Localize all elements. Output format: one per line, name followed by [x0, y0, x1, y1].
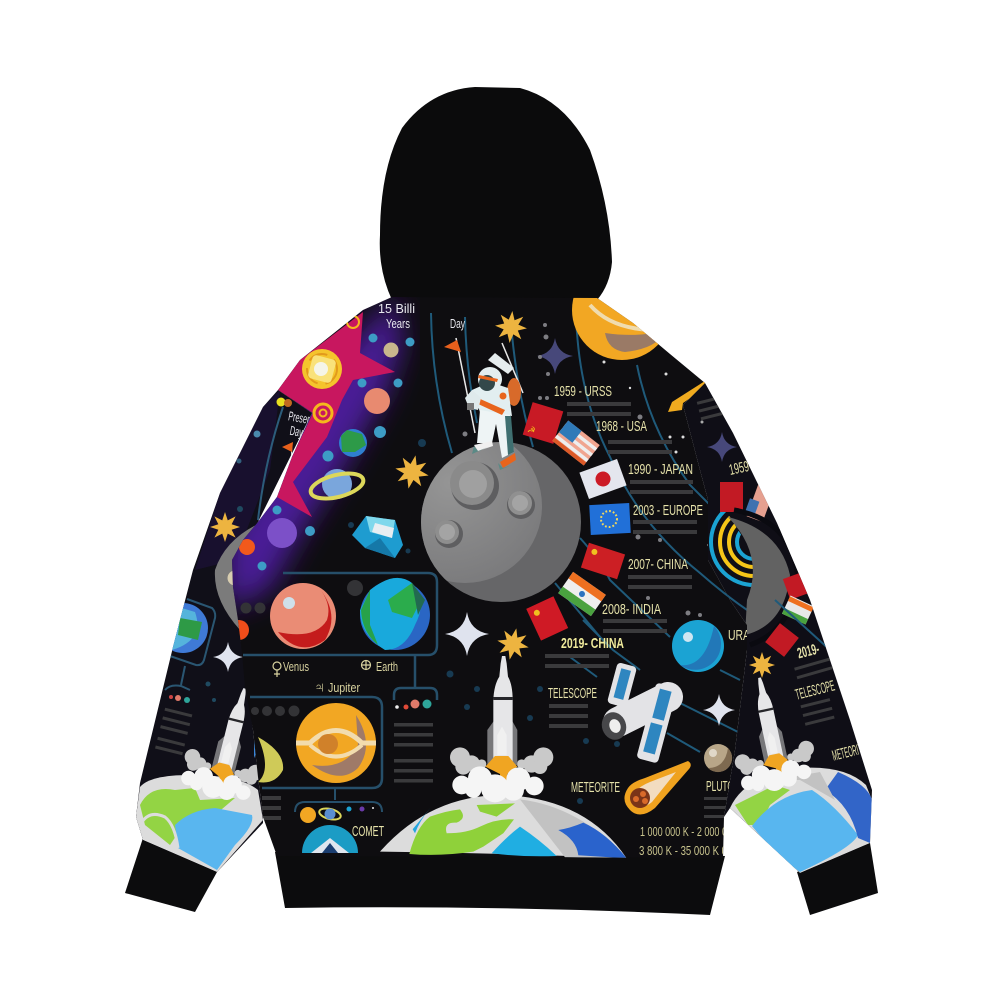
- label day: Day: [450, 316, 465, 331]
- nebula dots: [258, 334, 414, 570]
- sleeve rocket right: [719, 670, 821, 798]
- beige planet: [384, 342, 398, 358]
- label meteorite: METEORITE: [571, 779, 620, 796]
- flag: EU: [589, 503, 631, 535]
- sleeve earth: [136, 775, 263, 872]
- label years: Years: [386, 316, 410, 331]
- sleeve label: present day: Present: [287, 408, 315, 427]
- small planets chain upper: [395, 700, 432, 710]
- satellite: [598, 662, 678, 764]
- bars 2007: [628, 575, 692, 589]
- bars 1959: [567, 402, 631, 416]
- label 1959 URSS: 1959 - URSS: [554, 383, 612, 400]
- nebula: magenta shape: [277, 312, 395, 517]
- sleeve flags: [720, 482, 768, 522]
- comet planet: [302, 825, 358, 853]
- label venus: Venus: [283, 659, 309, 674]
- label 2019 China: 2019- CHINA: [561, 635, 624, 652]
- sleeve panel and planet: [158, 599, 215, 703]
- flag: USSR: ☭: [526, 424, 537, 436]
- label 1968 USA: 1968 - USA: [596, 418, 647, 435]
- top spiral: [347, 316, 359, 328]
- label jupiter: ♃: [314, 679, 325, 696]
- venus: [270, 583, 336, 649]
- dark dots: [240, 580, 363, 614]
- nebula: purple band: [225, 296, 402, 610]
- jupiter: [296, 703, 376, 783]
- flag: USSR: [523, 402, 563, 444]
- bars 1990: [630, 480, 693, 494]
- label comet: COMET: [352, 823, 384, 840]
- temperature line 1: 1 000 000 K - 2 000 0: [640, 824, 727, 839]
- temperature line 2: 3 800 K - 35 000 K 0: [639, 843, 727, 858]
- mars: [238, 620, 249, 640]
- uranus: [672, 620, 724, 672]
- label jupiter: [314, 679, 361, 696]
- yellow ring: [258, 737, 283, 782]
- right sleeve: [683, 383, 872, 873]
- navy star: [537, 338, 573, 374]
- text bars mid: [394, 723, 433, 782]
- flag: Japan: [579, 459, 627, 499]
- label venus: [273, 659, 309, 677]
- sleeve moon: [728, 517, 790, 635]
- flag: China 2019: [526, 596, 568, 641]
- label 2007 China: 2007- CHINA: [628, 556, 688, 573]
- grey moon fragment: [215, 524, 258, 630]
- label telescope: TELESCOPE: [548, 685, 597, 702]
- label 2008 India: 2008- INDIA: [602, 601, 661, 618]
- bars telescope: [549, 704, 588, 728]
- spiral galaxy: [314, 404, 332, 422]
- bars pluto: [704, 797, 732, 818]
- sleeve label 2019: 2019-: [796, 641, 821, 662]
- small earth: [339, 429, 367, 457]
- sleeve white star: [213, 642, 243, 672]
- bars 1968: [608, 440, 672, 454]
- sleeve label: present day: [288, 411, 310, 439]
- pluto: [704, 744, 732, 772]
- left sleeve: [136, 390, 312, 872]
- label uranus: URA: [728, 627, 750, 644]
- small grey dots: [462, 323, 702, 617]
- label 2003 Europe: 2003 - EUROPE: [633, 502, 703, 519]
- bars 2003: [633, 520, 697, 534]
- main rocket: [450, 656, 553, 802]
- main earth: [380, 795, 627, 858]
- salmon planet: [364, 388, 390, 414]
- jupiter panel: [250, 697, 382, 788]
- sleeve label 1959: 1959: [728, 458, 751, 479]
- gem: [352, 516, 403, 558]
- sleeve star: [210, 512, 240, 542]
- body panel: [232, 297, 747, 858]
- planets panel frame: [243, 573, 437, 700]
- label earth: [361, 659, 398, 674]
- white star upper: [445, 612, 489, 656]
- white specks: [602, 360, 710, 546]
- label pluto: PLUTO: [706, 778, 734, 795]
- jupiter branch: [295, 788, 382, 812]
- sleeve rocket left: [176, 678, 282, 809]
- sleeve bars top: [697, 396, 725, 420]
- right sleeve: METEORITE: [831, 740, 868, 765]
- earth planet: [360, 578, 430, 650]
- bars 2019: [545, 654, 609, 668]
- bottom hem: [275, 852, 725, 915]
- flag: India: [558, 572, 606, 616]
- sleeve star gold: [749, 652, 775, 678]
- moon: [388, 429, 581, 602]
- orbit lines: [431, 312, 750, 752]
- sleeve flag: [282, 442, 293, 456]
- gold star left: [396, 456, 428, 488]
- orange planet: [239, 539, 255, 555]
- gold star top: [494, 310, 528, 344]
- left cuff: [125, 838, 217, 912]
- label 1990 Japan: 1990 - JAPAN: [628, 461, 693, 478]
- label jupiter: Jupiter: [328, 680, 361, 695]
- bars 2008: [603, 619, 667, 633]
- flag: USA: [552, 420, 600, 466]
- sleeve navy star: [707, 432, 737, 462]
- sleeve label: present day: Day: [289, 423, 304, 440]
- white star right: [703, 694, 735, 726]
- flag: China 2007: [581, 543, 625, 579]
- bars lower left: [262, 796, 281, 820]
- labels top: 15 Billi: [378, 301, 415, 316]
- meteorite: [624, 761, 691, 815]
- sleeve text bars: [155, 708, 192, 755]
- purple planet: [267, 518, 297, 548]
- small planets chain lower: [300, 806, 374, 823]
- sleeve earth right: [730, 768, 872, 873]
- astronaut: [444, 338, 523, 470]
- yellow arc body edge: [668, 381, 708, 412]
- label earth: Earth: [376, 659, 398, 674]
- saturn: [308, 469, 366, 503]
- blue specks: [348, 439, 620, 804]
- dark dots row: [251, 706, 300, 716]
- gold star bottom: [494, 625, 532, 663]
- right cuff: [797, 843, 878, 915]
- right sleeve: TELESCOPE: [794, 677, 837, 704]
- rings: [709, 512, 753, 587]
- hood: [380, 87, 612, 316]
- planet top right: [572, 260, 672, 360]
- sun: [302, 349, 342, 389]
